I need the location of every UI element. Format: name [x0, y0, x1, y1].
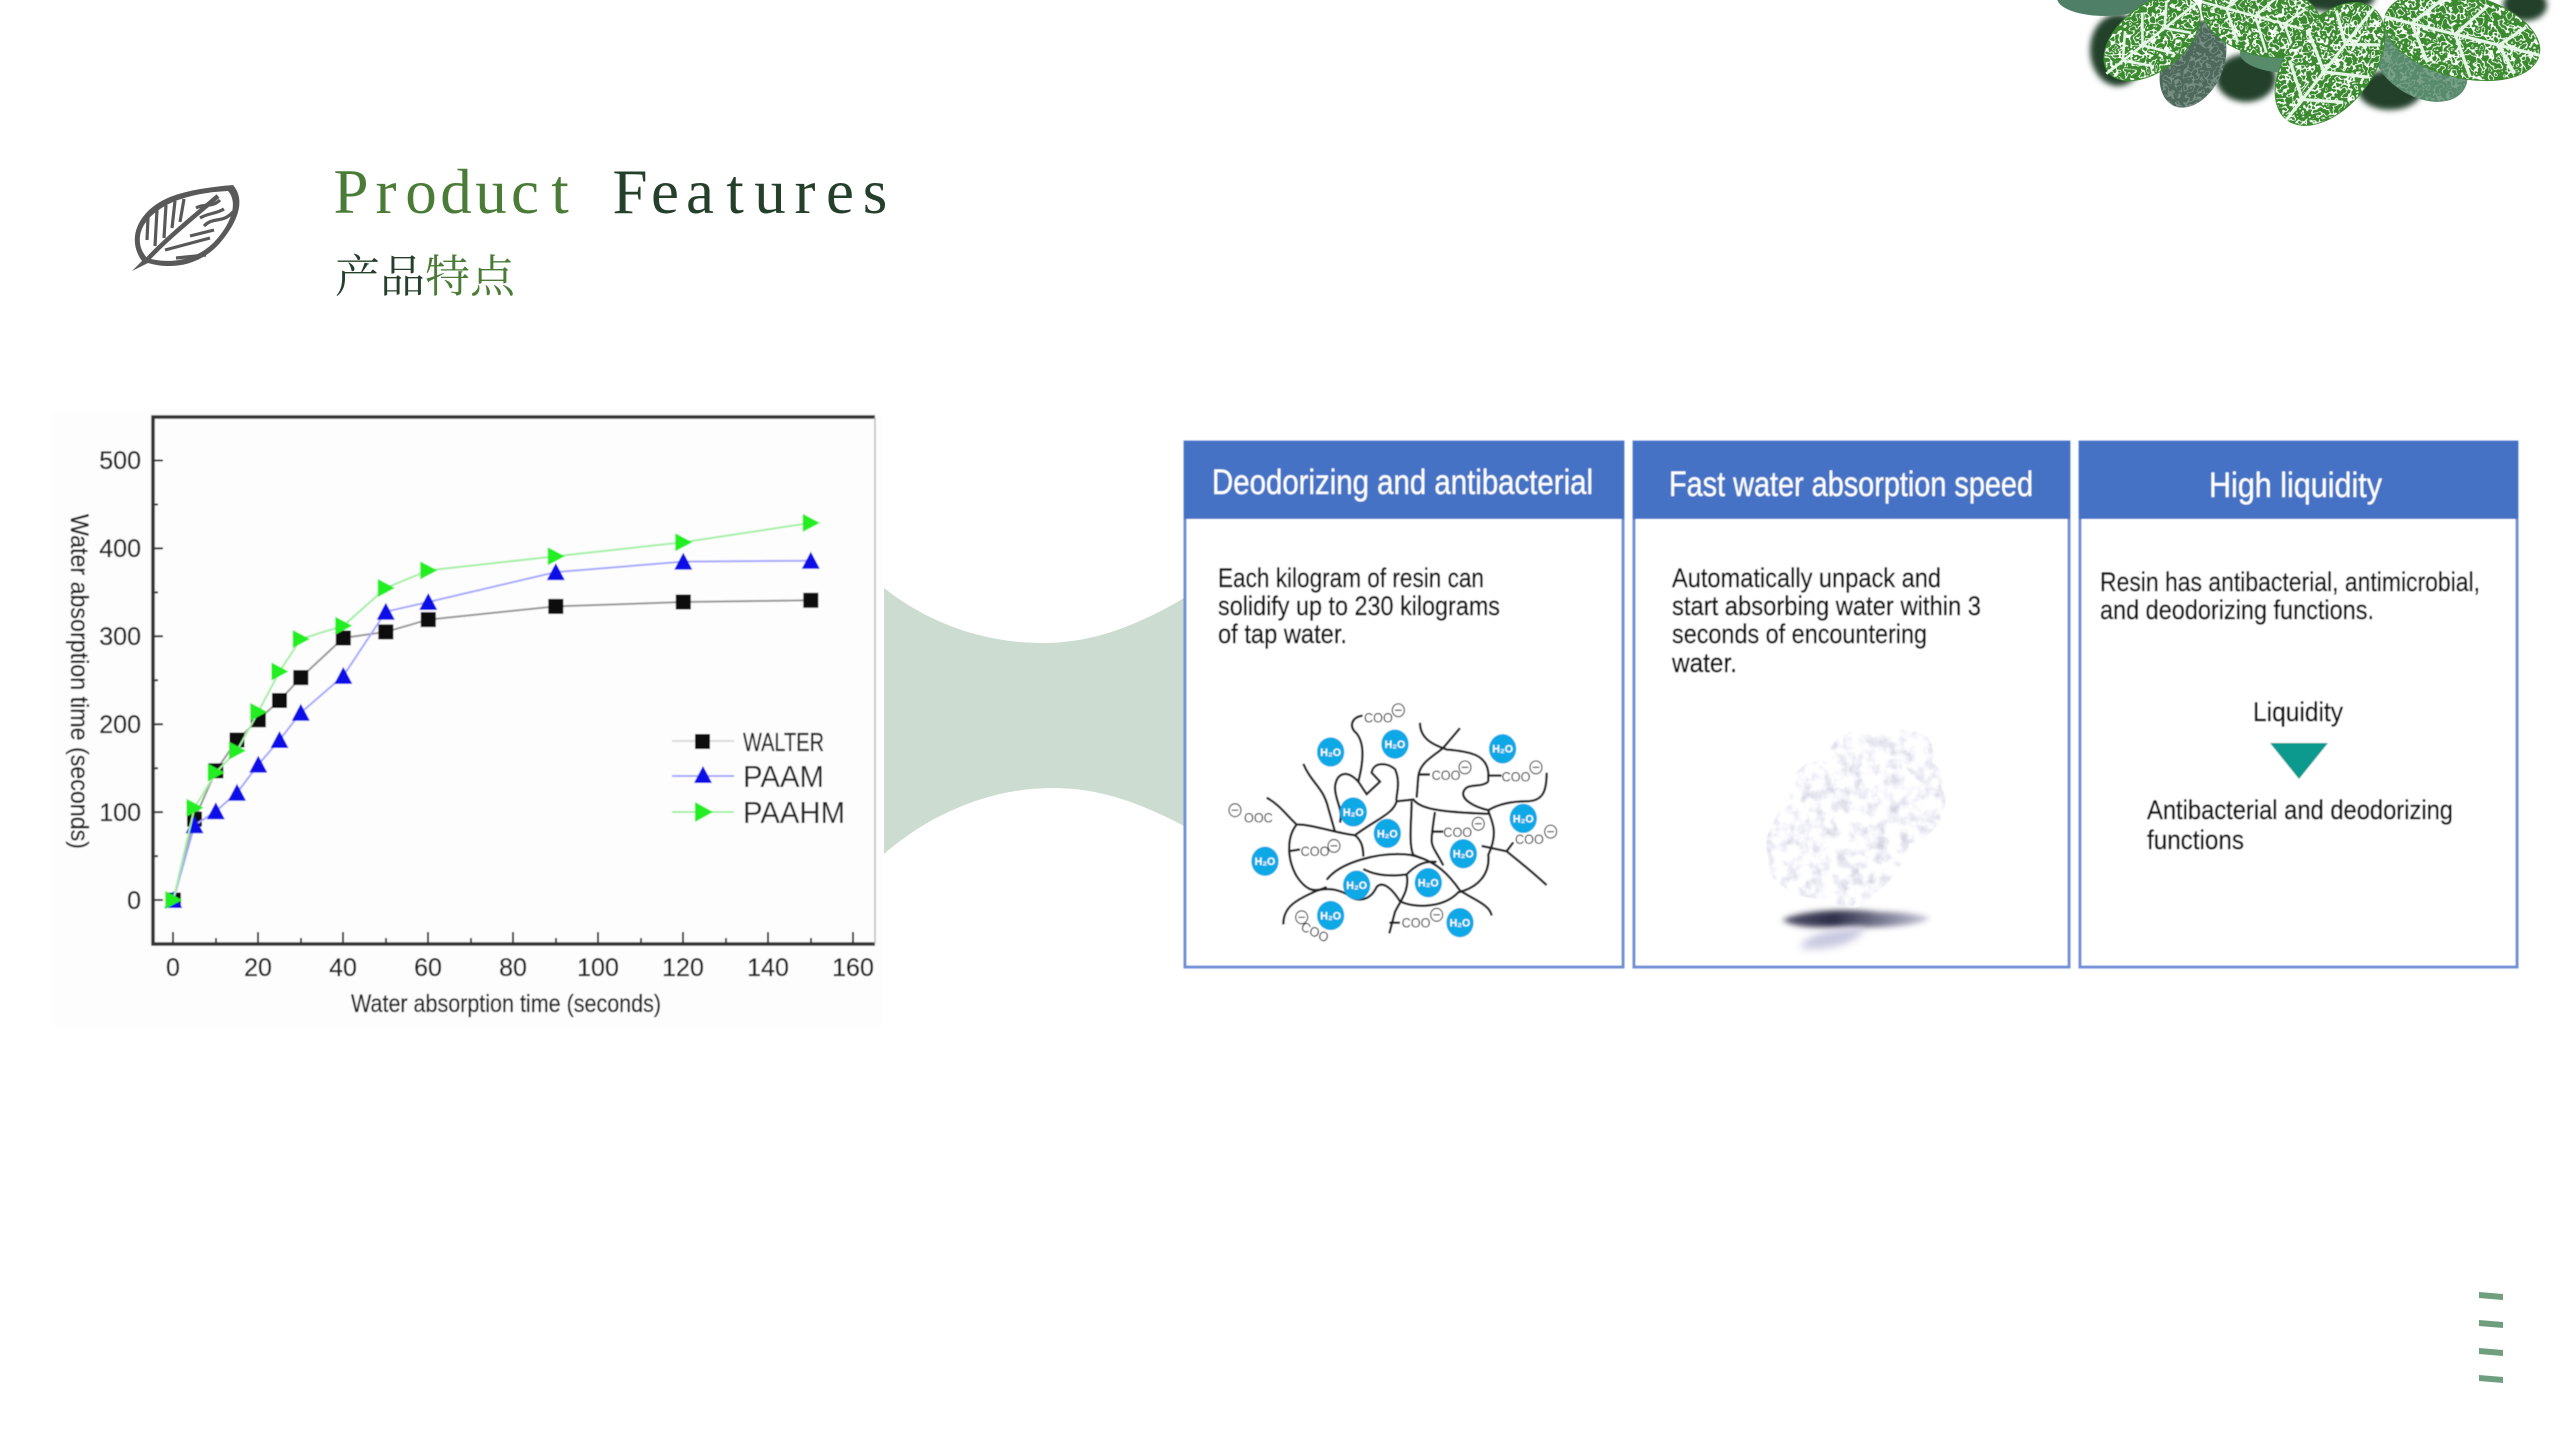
x axis labels: 0 — [166, 954, 180, 982]
body text: seconds of encountering — [1672, 619, 1927, 649]
y axis title: Water absorption time (seconds) — [65, 514, 93, 849]
x axis labels: 160 — [832, 954, 874, 982]
panel header — [2079, 441, 2518, 519]
water molecule labels: H₂O — [1377, 828, 1398, 840]
decoration: four green dashes bottom right — [2479, 1292, 2503, 1383]
x axis labels: 140 — [747, 954, 789, 982]
y axis labels: 100 — [99, 799, 141, 827]
body text: Each kilogram of resin can — [1218, 563, 1484, 593]
body text — [1218, 563, 1500, 649]
bright leaf 1 — [2103, 0, 2201, 82]
panel header — [1633, 441, 2070, 519]
arrow: down triangle — [2270, 743, 2328, 779]
water molecule labels — [1255, 739, 1534, 930]
panel: high liquidity — [2079, 441, 2518, 967]
y axis labels: 300 — [99, 623, 141, 651]
series: WALTER — [173, 600, 811, 900]
body text: of tap water. — [1218, 619, 1347, 649]
carboxylate labels: COO — [1502, 769, 1530, 784]
water molecule labels: H₂O — [1450, 917, 1471, 930]
water molecule labels: H₂O — [1418, 877, 1439, 890]
x axis labels: 100 — [577, 954, 619, 982]
chart: water absorption line chart — [52, 412, 882, 1026]
legend: PAAHM — [743, 795, 845, 830]
y axis labels: 500 — [99, 447, 141, 475]
connector: funnel shape between chart and panels — [884, 588, 1184, 854]
panel frame — [1185, 442, 1623, 967]
icon: grey leaf — [132, 185, 239, 271]
body text — [2100, 567, 2480, 625]
body text: water. — [1671, 648, 1737, 678]
header text: Deodorizing and antibacterial — [1212, 463, 1593, 502]
carboxylate labels: COO — [1432, 767, 1460, 783]
legend: WALTER — [743, 727, 824, 757]
bright leaf 2 — [2201, 0, 2320, 58]
water molecule labels: H₂O — [1513, 813, 1534, 825]
chart background — [52, 412, 882, 1026]
body text: Resin has antibacterial, antimicrobial, — [2100, 567, 2480, 597]
legend: PAAM — [743, 759, 824, 794]
water molecule labels: H₂O — [1385, 739, 1406, 751]
carboxylate labels: OOC — [1244, 810, 1273, 826]
carboxylate labels: COO — [1299, 919, 1331, 946]
y axis labels: 400 — [99, 535, 141, 563]
result text: functions — [2147, 825, 2244, 855]
body text: solidify up to 230 kilograms — [1218, 591, 1500, 621]
x axis labels — [166, 954, 874, 982]
water molecule labels: H₂O — [1343, 807, 1364, 819]
decoration: leaf cluster top right — [2057, 0, 2552, 126]
x axis labels: 80 — [499, 954, 527, 982]
x axis labels: 120 — [662, 954, 704, 982]
bright leaf 4 — [2384, 0, 2540, 82]
legend — [672, 727, 845, 830]
x axis labels: 40 — [329, 954, 357, 982]
carboxylate labels: COO — [1402, 915, 1430, 931]
carboxylate labels: COO — [1443, 825, 1472, 840]
y axis labels: 0 — [127, 887, 141, 915]
water molecule labels: H₂O — [1320, 747, 1341, 759]
diagram: polymer network with water molecules — [1229, 704, 1557, 946]
header text: Fast water absorption speed — [1669, 465, 2033, 504]
body text: start absorbing water within 3 — [1672, 591, 1981, 621]
leaf shadows — [2090, 0, 2547, 110]
title: Product Features: Product Features — [333, 157, 887, 227]
plot frame — [153, 417, 875, 944]
series: PAAM — [173, 561, 811, 900]
panel: deodorizing and antibacterial — [1184, 441, 1624, 967]
water molecules — [1251, 730, 1537, 937]
panel header — [1184, 441, 1624, 519]
carboxylate labels — [1244, 710, 1544, 946]
illustration: resin crystal — [1766, 730, 1946, 949]
carboxylate labels: COO — [1515, 832, 1544, 847]
water molecule labels: H₂O — [1320, 910, 1341, 923]
carboxylate labels: COO — [1301, 844, 1329, 859]
y axis labels — [99, 447, 141, 915]
carboxylate labels: COO — [1364, 710, 1393, 726]
negative charge symbols — [1229, 704, 1557, 924]
result text: Antibacterial and deodorizing — [2147, 795, 2453, 825]
x axis labels: 60 — [414, 954, 442, 982]
water molecule labels: H₂O — [1346, 880, 1367, 892]
x axis title: Water absorption time (seconds) — [351, 990, 661, 1018]
water molecule labels: H₂O — [1492, 743, 1513, 756]
dark background leaves — [2057, 0, 2468, 108]
panel: fast water absorption speed — [1633, 441, 2070, 967]
x axis labels: 20 — [244, 954, 272, 982]
water molecule labels: H₂O — [1255, 856, 1276, 868]
body text: and deodorizing functions. — [2100, 595, 2374, 625]
body text: Automatically unpack and — [1672, 563, 1941, 593]
panel frame — [1634, 442, 2069, 967]
subtitle: Chinese heading: 产品特点 — [335, 252, 516, 302]
polymer chains — [1267, 716, 1547, 933]
y axis labels: 200 — [99, 711, 141, 739]
bright leaf 3 — [2274, 2, 2386, 126]
body text — [1671, 563, 1981, 678]
header text: High liquidity — [2209, 466, 2382, 505]
result text — [2147, 795, 2453, 855]
label: liquidity: Liquidity — [2253, 697, 2343, 727]
water molecule labels: H₂O — [1453, 848, 1474, 861]
series: PAAHM — [173, 523, 811, 900]
panel frame — [2080, 442, 2517, 967]
